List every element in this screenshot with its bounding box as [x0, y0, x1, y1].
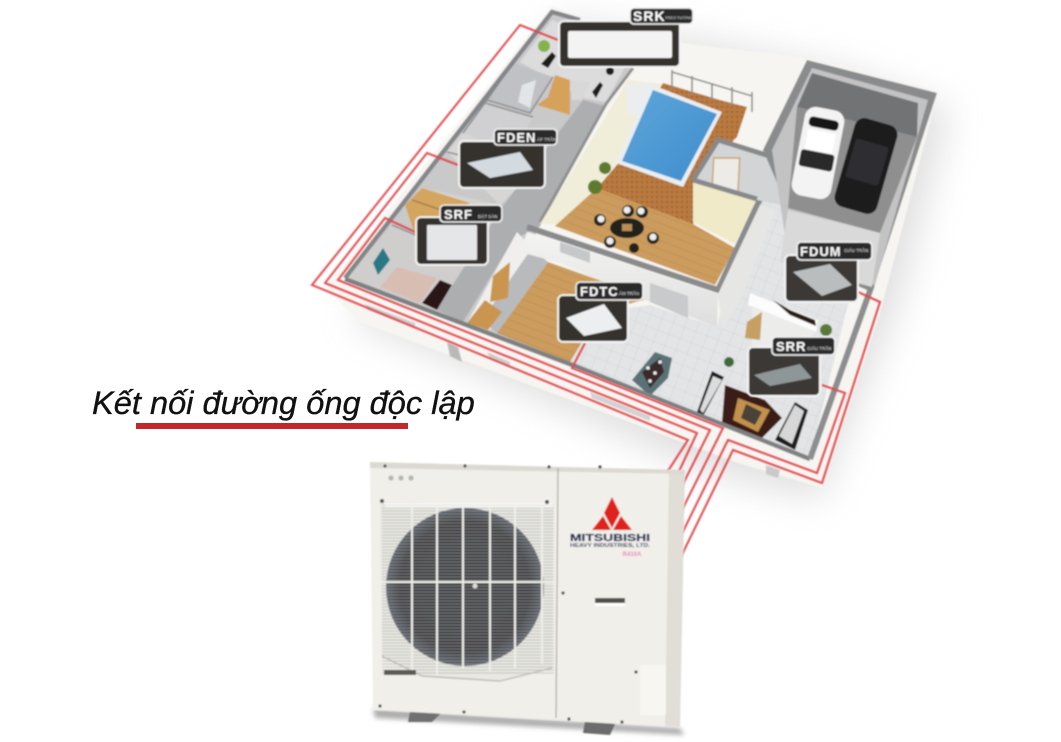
small room	[693, 140, 808, 207]
wood counter	[537, 75, 570, 115]
red independent pipes	[312, 25, 880, 573]
pipe: SRR	[668, 385, 845, 562]
heading underline	[136, 423, 408, 429]
pipe: FDUM	[673, 292, 880, 573]
label: FDUM: FDUM	[800, 244, 842, 259]
label: FDTC: FDTC	[580, 284, 619, 299]
pipe: FDTC	[572, 343, 723, 548]
plant and furniture	[538, 40, 550, 52]
handles	[384, 670, 416, 675]
front wall of main room	[520, 232, 718, 327]
brand text: R410A	[623, 552, 642, 558]
third room with wood	[405, 188, 500, 250]
screw points	[378, 464, 638, 724]
left wing base	[345, 10, 640, 366]
label: FDTC	[576, 282, 643, 300]
panel: FDUM concealed unit	[785, 242, 872, 302]
panel: SRK wall-mounted unit	[559, 8, 693, 67]
top room	[520, 20, 633, 102]
white car	[790, 105, 846, 201]
unit image: cassette	[566, 304, 622, 336]
unit image: ceiling suspended	[467, 152, 533, 178]
garage	[763, 60, 937, 292]
partition walls	[392, 63, 553, 262]
right wall	[810, 285, 872, 459]
label: SRF	[440, 205, 502, 222]
sofa and rug	[722, 385, 782, 440]
fan	[386, 508, 544, 666]
brand text: MITSUBISHI	[570, 532, 650, 544]
cream corridor wall	[540, 80, 662, 224]
soft ground shadow	[350, 20, 950, 500]
bedroom	[346, 225, 480, 310]
panel: FDTC cassette unit	[558, 282, 643, 342]
slab ledge	[325, 6, 938, 488]
plants	[588, 162, 741, 237]
house floor plan	[325, 6, 950, 500]
cabinet body	[370, 462, 685, 727]
panel: SRF floor unit	[416, 205, 502, 265]
pipe: SRF	[338, 218, 710, 490]
brand text: HEAVY INDUSTRIES, LTD.	[570, 543, 651, 549]
wood floor kitchen and hall	[497, 262, 650, 362]
central grey corridor	[437, 100, 606, 322]
heading: Kết nối đường ống độc lập	[92, 384, 475, 421]
service panel	[640, 665, 666, 715]
label: FDTC: ÂM TRẦN	[619, 290, 639, 296]
valves	[388, 475, 414, 481]
bathroom	[487, 63, 553, 113]
logo: Mitsubishi diamonds	[592, 497, 632, 530]
outer wall of left wing	[345, 12, 580, 278]
front wall top	[345, 279, 810, 459]
railing	[672, 70, 752, 112]
black car	[832, 116, 900, 216]
inner white wall	[748, 293, 818, 332]
dining set	[594, 205, 659, 253]
label: SRK: SRK	[633, 8, 666, 24]
outdoor unit	[370, 462, 685, 735]
label: FDUM	[797, 242, 872, 260]
label: SRF: SRF	[444, 207, 473, 222]
pipe: SRK	[312, 25, 688, 474]
feet	[408, 712, 442, 722]
label: SRR	[772, 337, 835, 355]
tile floor	[570, 200, 865, 458]
label: FDEN: FDEN	[497, 130, 536, 145]
label: SRR: SRR	[776, 339, 806, 354]
pool deck	[597, 83, 747, 228]
label: FDEN: ÁP TRẦN	[537, 136, 556, 142]
unit image: ducted	[793, 264, 852, 296]
kitchen	[467, 232, 532, 330]
panel: SRR concealed unit	[748, 337, 835, 396]
unit shadow	[373, 708, 684, 735]
label: FDUM: GIẤU TRẦN	[844, 247, 868, 253]
second room	[463, 103, 533, 160]
pipe: FDEN	[325, 153, 697, 482]
fan grille	[380, 502, 554, 681]
label: SRF: ĐẶT SÀN	[478, 213, 497, 219]
unit image: wall unit	[568, 31, 672, 58]
label: SRR: GIẤU TRẦN	[807, 345, 831, 351]
panel: FDEN ceiling unit	[459, 129, 557, 188]
unit image: floor unit	[427, 225, 477, 260]
dining area	[632, 352, 672, 396]
slab supports	[365, 304, 415, 328]
label: SRK	[630, 8, 693, 24]
unit image: slim duct	[754, 364, 812, 386]
wood floor main	[555, 188, 735, 285]
label: SRK: TREO TƯỜNG	[665, 15, 692, 20]
brand text	[570, 532, 651, 558]
pool	[616, 84, 722, 187]
label: FDEN	[494, 129, 557, 145]
